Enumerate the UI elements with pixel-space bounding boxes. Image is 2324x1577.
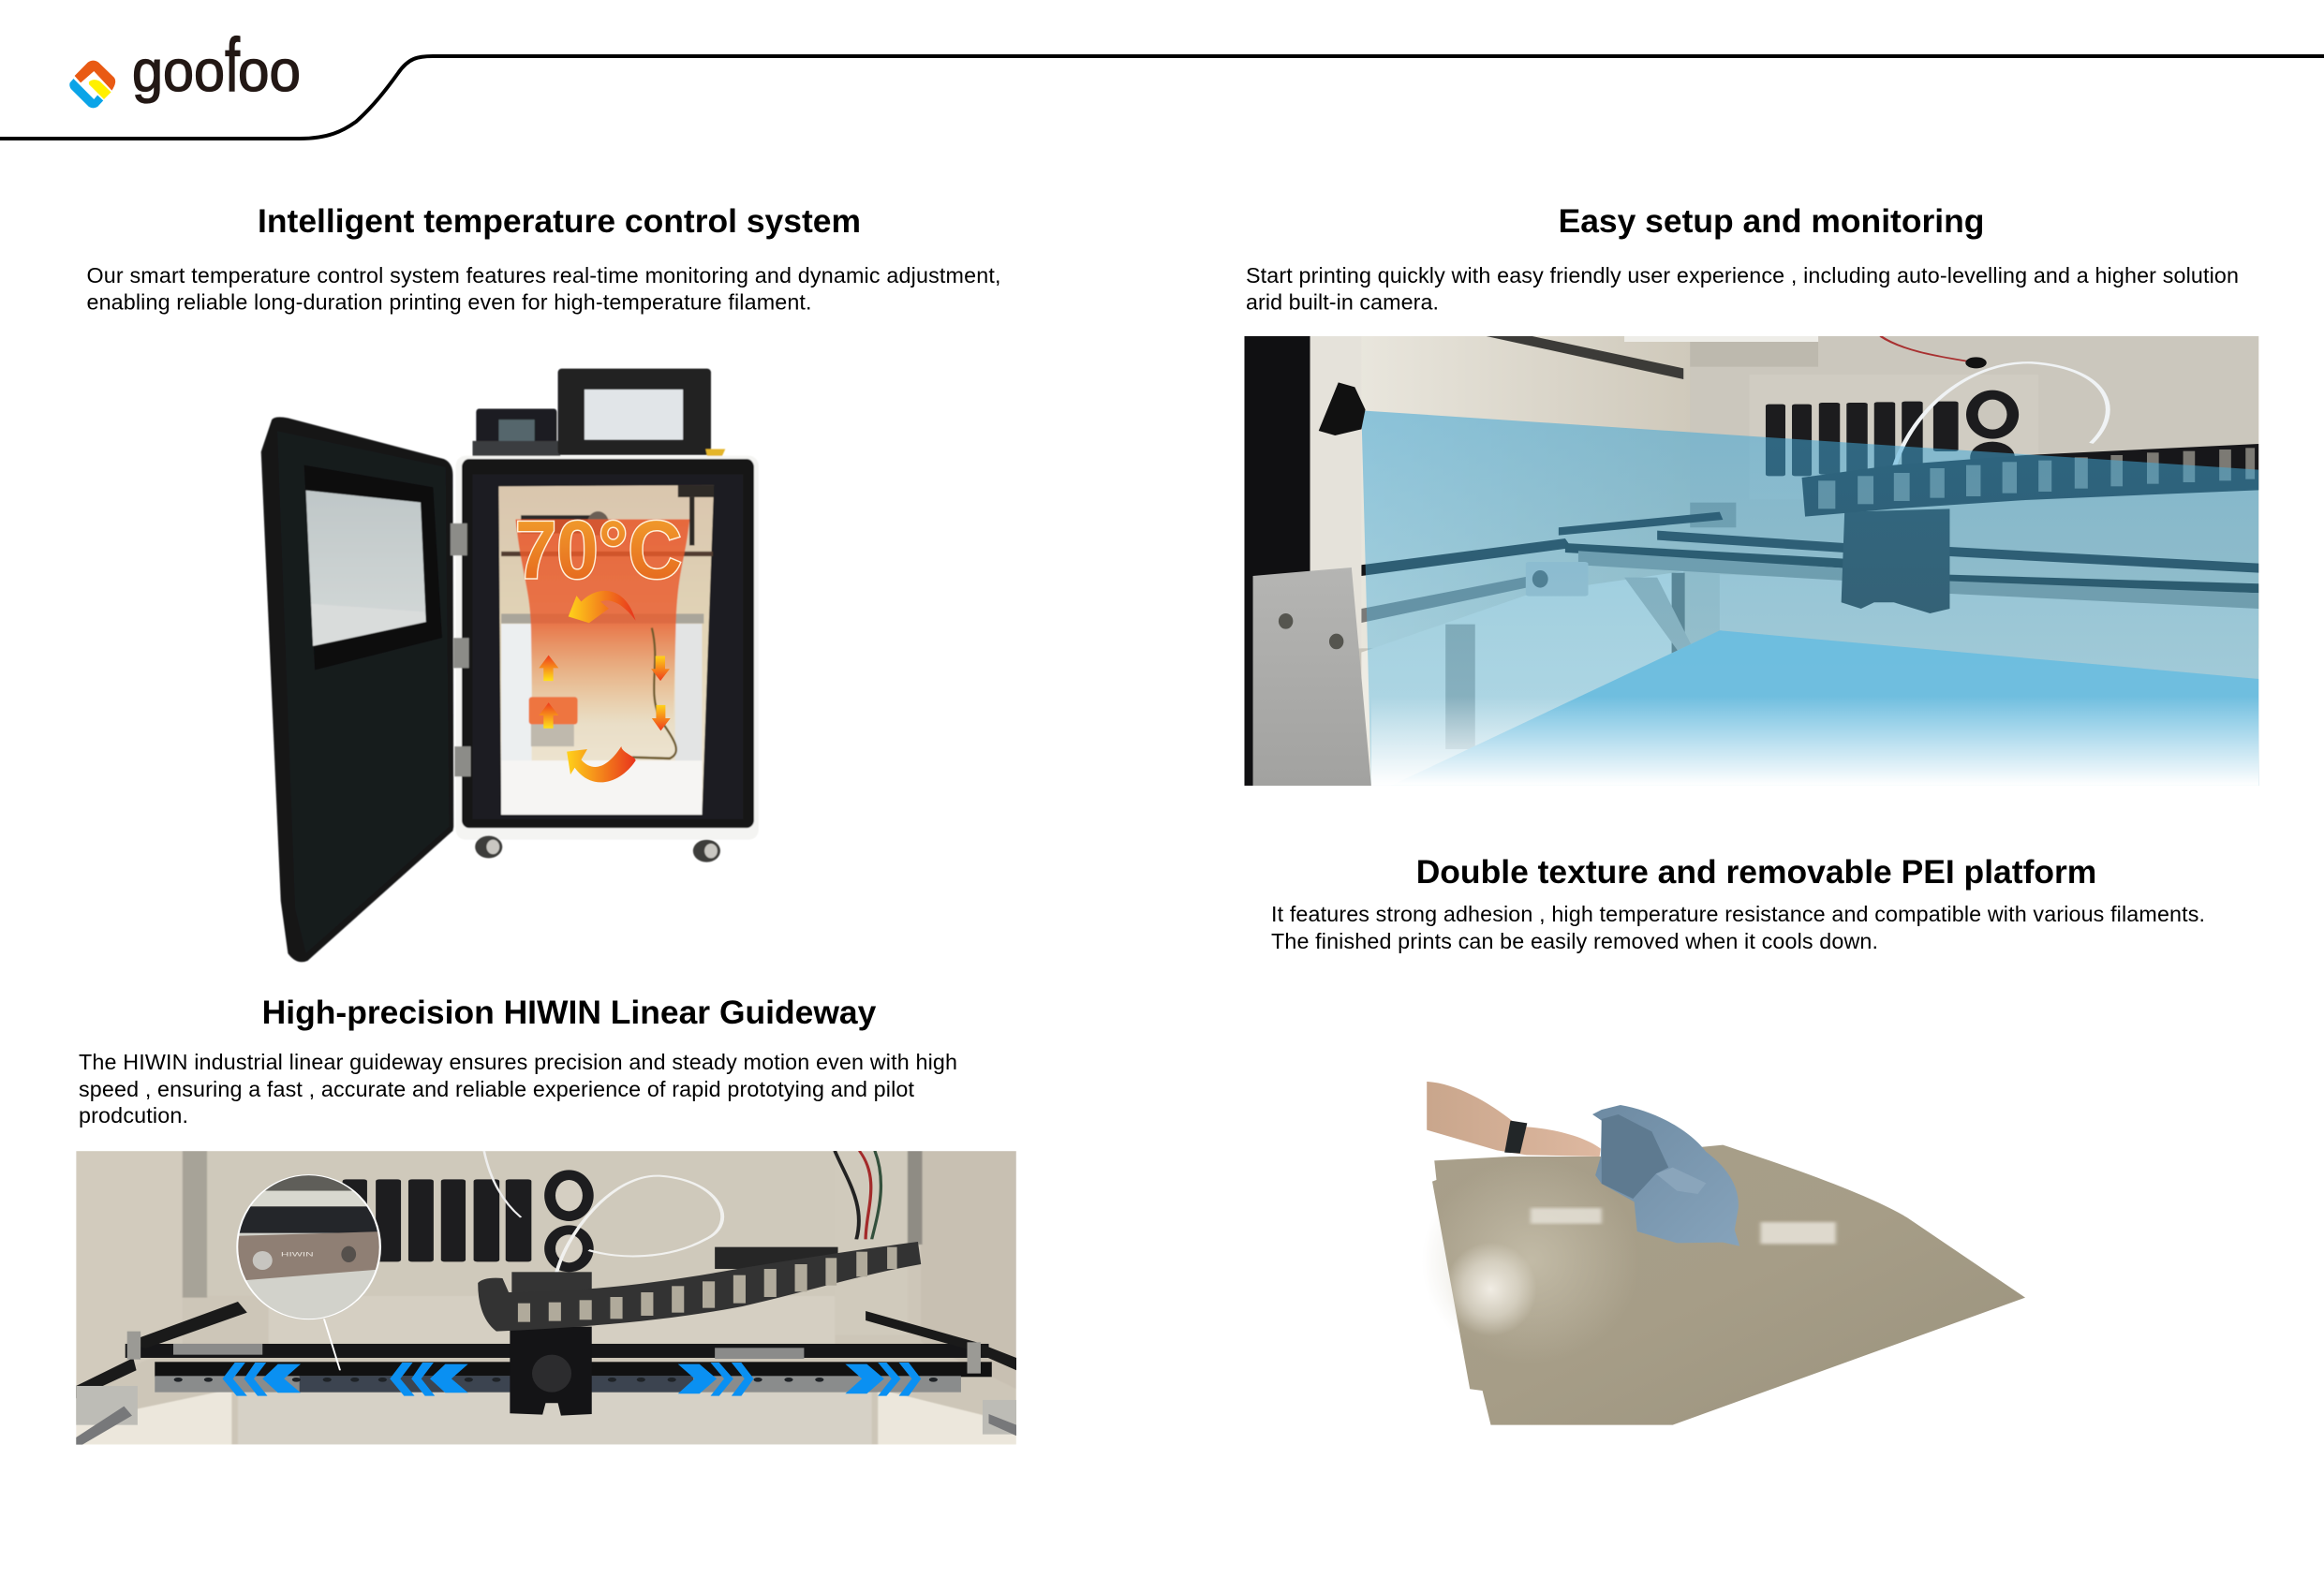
- panel: easy setup and monitoring: [1244, 202, 2258, 786]
- hand and arm: [1427, 1082, 1601, 1157]
- heading: High-precision HIWIN Linear Guideway: [262, 994, 877, 1031]
- build plate: [1432, 1145, 2025, 1425]
- curved arrow top: [569, 591, 636, 623]
- heat flow: [515, 520, 689, 724]
- printed part: [1592, 1105, 1739, 1246]
- heater and vent: [529, 697, 578, 724]
- description: prodcution.: [79, 1103, 188, 1127]
- description: enabling reliable long-duration printing even for high-temperature filament.: [86, 290, 811, 315]
- header curved line: [0, 56, 2324, 139]
- description: Start printing quickly with easy friendly user experience , including auto-levelling and a higher solution: [1246, 263, 2239, 287]
- up arrow lower: [539, 702, 558, 729]
- belts and linear rails: [1361, 512, 2258, 623]
- printer bed and frame: [1361, 503, 2258, 786]
- blue camera field of view: [1361, 410, 2258, 786]
- print head carriage: [510, 1272, 592, 1416]
- panel: double texture PEI platform: [1271, 853, 2205, 1425]
- magnifier lens: HIWIN: [281, 1252, 314, 1258]
- PEI plate photo: [1422, 1082, 2025, 1425]
- cable: [632, 627, 676, 759]
- heading: Easy setup and monitoring: [1559, 202, 1984, 240]
- drag chain: [478, 1242, 921, 1332]
- print head carriage: [1842, 508, 1949, 613]
- printer photo with open door: [261, 369, 759, 962]
- bright floor of view: [1391, 630, 2258, 786]
- chamber walls: [76, 1151, 1016, 1445]
- cabinet: [456, 456, 759, 840]
- small control screen: [476, 409, 556, 455]
- description: arid built-in camera.: [1246, 290, 1439, 315]
- right motion chevrons: [678, 1363, 921, 1396]
- airflow arrows: [539, 591, 671, 782]
- icon: logo diamond: [69, 61, 115, 108]
- down arrow upper: [651, 656, 670, 681]
- plate reflections: [1422, 1158, 1836, 1364]
- door frame and camera mount: [1244, 336, 1371, 786]
- chamber walls: [1310, 336, 2259, 763]
- hinges: [451, 523, 467, 555]
- header band: [0, 23, 2324, 139]
- panel: intelligent temperature control: [86, 202, 1000, 962]
- door: [261, 417, 453, 962]
- description: The finished prints can be easily removed when it cools down.: [1271, 929, 1878, 953]
- logo wordmark: f: [225, 23, 240, 108]
- panel: HIWIN linear guideway: [76, 994, 1016, 1449]
- goofoo logo: [69, 23, 301, 108]
- logo wordmark: [132, 23, 301, 108]
- printer body: [261, 369, 759, 962]
- view fade out: [1371, 696, 2258, 786]
- vent slots and fans: [1766, 391, 2019, 476]
- magnifier lens: [231, 1173, 386, 1319]
- up arrow upper: [539, 656, 558, 681]
- description: The HIWIN industrial linear guideway ensures precision and steady motion even with high: [79, 1050, 957, 1074]
- description: It features strong adhesion , high temperature resistance and compatible with various filaments.: [1271, 902, 2205, 926]
- curved arrow bottom: [567, 746, 636, 782]
- filament tube: [1894, 362, 2108, 468]
- heading: Double texture and removable PEI platform: [1416, 853, 2096, 891]
- description: Our smart temperature control system features real-time monitoring and dynamic adjustment,: [86, 263, 1000, 287]
- large touch screen: [558, 369, 711, 455]
- description: speed , ensuring a fast , accurate and reliable experience of rapid prototying and pilot: [79, 1077, 915, 1101]
- magnifier callout line: [324, 1319, 340, 1370]
- logo wordmark: oo: [238, 39, 301, 104]
- down arrow lower: [652, 705, 671, 730]
- linear rail photo: [76, 1151, 1016, 1449]
- interior: [498, 485, 714, 815]
- heading: Intelligent temperature control system: [258, 202, 861, 240]
- vent slots and fans: [343, 1170, 594, 1272]
- left motion chevrons: [223, 1363, 468, 1396]
- logo wordmark: goo: [132, 39, 225, 104]
- camera view photo: [1244, 336, 2258, 786]
- drag chain: [1802, 444, 2258, 517]
- belts and rails: [76, 1302, 1016, 1398]
- filament tube and wires: [484, 1151, 881, 1280]
- temperature value: 70°C: [515, 505, 682, 596]
- wheels: [475, 835, 502, 858]
- rods and blocks: [76, 1332, 1016, 1449]
